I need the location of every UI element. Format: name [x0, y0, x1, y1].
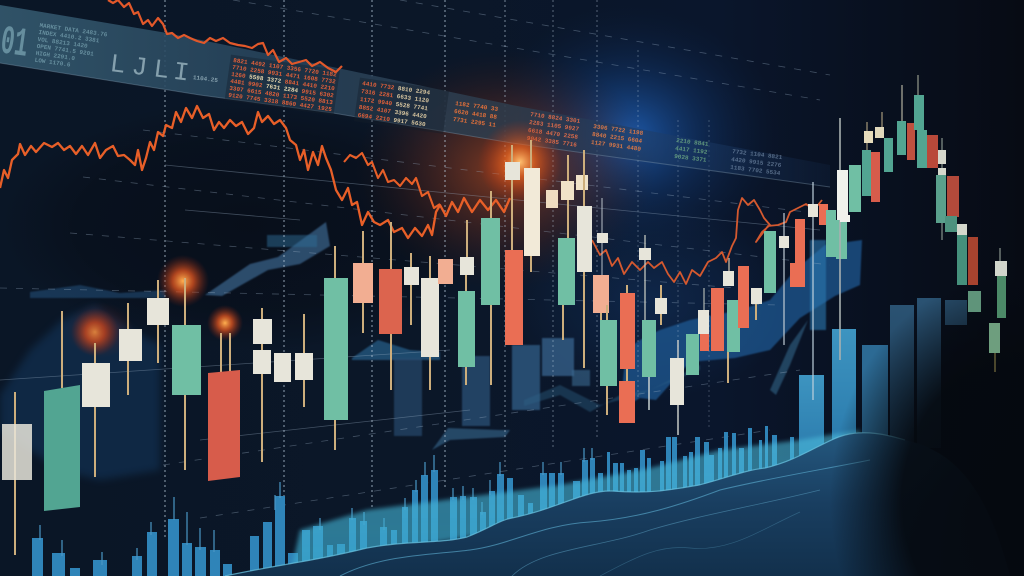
candle: teal	[997, 276, 1006, 318]
ticker text: red data table three: 7731 2295 11	[452, 116, 497, 129]
candle: pale	[460, 220, 474, 275]
candle: teal	[826, 210, 836, 257]
candle: teal	[914, 75, 924, 130]
candlesticks: centre cluster	[481, 140, 762, 435]
ticker text: red data table four: 2283 1105 9927	[529, 119, 580, 133]
background translucent area charts	[0, 222, 862, 480]
orange price line: second strand	[344, 153, 440, 208]
ticker text: red data table two: 7316 2281 6633 1120	[361, 88, 430, 104]
candle: teal	[764, 231, 776, 293]
candle: pale	[837, 118, 850, 360]
ticker text: red data table five: 1127 9931 4480	[590, 139, 642, 153]
candle: teal	[44, 311, 80, 511]
candle: red	[790, 219, 805, 287]
candle: pale	[2, 392, 32, 555]
ticker text: blue data table: 7732 1104 8821	[732, 148, 783, 161]
ticker text: red data table one: 9120 7745 3318 8860 4427 1925	[228, 92, 333, 113]
candle: pale	[524, 140, 540, 272]
ticker text: red data table two	[354, 78, 449, 134]
candle: pale	[561, 155, 574, 238]
candle: pale	[957, 224, 967, 235]
ticker text: left data block: INDEX 4410.2 3381	[38, 29, 100, 44]
candlesticks: right cluster	[764, 75, 1007, 400]
candle: pale	[253, 308, 272, 462]
market data ticker band	[0, 5, 830, 187]
candle: dim teal	[989, 323, 1000, 372]
chart grid lines	[0, 0, 830, 518]
candle: teal	[558, 238, 575, 340]
ticker text: red data table three: 1182 7740 33	[455, 100, 499, 113]
candle: pale	[779, 213, 789, 345]
ticker text: red data table two: 1172 9940 5528 7741	[359, 96, 429, 112]
candle: peach	[593, 275, 609, 340]
ticker text: bracket block: 1104.25	[192, 74, 219, 84]
candle: pale	[751, 288, 762, 320]
candle: red	[927, 135, 938, 168]
candle: red	[379, 222, 402, 390]
orange price line: upper	[108, 0, 342, 72]
orange glows behind wicks	[66, 120, 562, 358]
candle: teal	[324, 246, 348, 450]
candle: pale	[864, 131, 873, 143]
candle: teal	[172, 278, 201, 470]
ticker text: red data table five	[590, 123, 644, 153]
ticker text: red data table four: 7710 8824 3301	[530, 111, 581, 125]
candle: dim teal	[968, 291, 981, 312]
candle: orange	[505, 250, 523, 345]
candle: teal	[897, 85, 906, 155]
candle: teal	[884, 138, 893, 172]
orange price line: lower left	[0, 106, 510, 238]
candle: teal	[686, 334, 699, 375]
candle: pale	[670, 340, 684, 435]
candle: teal	[936, 175, 946, 223]
candle: red	[700, 334, 709, 351]
candle: pale	[576, 175, 588, 190]
data terrain mountain	[225, 433, 1010, 576]
candle: pale	[274, 353, 291, 382]
ticker text: red data table five: 3306 7722 1198	[593, 123, 644, 137]
candle: teal	[600, 305, 617, 415]
ticker text: red data table three	[452, 100, 499, 129]
candle: pale	[82, 343, 110, 477]
volume bars	[32, 426, 794, 576]
ticker text: bracket block: I	[172, 57, 191, 88]
candle: peach	[353, 231, 373, 333]
vertical dotted grid lines	[165, 0, 709, 540]
ticker text: bracket block: L	[152, 54, 171, 86]
candle: teal	[945, 216, 957, 232]
volume bar wicks	[40, 448, 592, 565]
ticker text: left data block: MARKET DATA 2483.76	[39, 22, 108, 39]
candle: red	[619, 369, 635, 423]
ticker text: red data table four: 6618 4470 2258	[527, 127, 579, 141]
candle: teal	[836, 220, 847, 259]
candle: pale	[253, 350, 271, 374]
ticker text: bracket block: J	[130, 52, 149, 83]
ticker text: green data table	[674, 137, 709, 164]
candle: pale	[655, 285, 667, 325]
ticker text: red data table one	[225, 55, 340, 116]
large background bars	[799, 298, 967, 460]
cyan glow band above terrain	[290, 430, 860, 576]
ticker text: red data table three: 6620 4418 88	[454, 108, 498, 121]
candle: red	[947, 176, 959, 217]
candle: red	[208, 333, 240, 481]
ticker text: left data block: VOL 88213 1420	[37, 36, 88, 50]
candle: teal	[642, 320, 656, 410]
candlesticks: left cluster	[2, 220, 475, 555]
candle: peach	[438, 259, 453, 284]
ticker text: blue data table: 1183 7702 5534	[730, 164, 781, 177]
candle: pale	[938, 138, 946, 240]
candle: red	[620, 285, 635, 369]
ticker text: red data table four: 9042 3385 7716	[526, 135, 578, 149]
ticker text: red data table two: 4410 7732 8810 2294	[362, 80, 431, 97]
candle: teal	[481, 191, 500, 385]
candle: pale	[421, 256, 439, 390]
candle: red	[711, 288, 724, 351]
ticker text: red data table two: 8852 4107 3396 4420	[358, 104, 428, 120]
candle: red	[871, 152, 880, 202]
candle: pale	[577, 150, 592, 368]
ticker text: red data table five: 8840 2215 6604	[592, 131, 643, 145]
ticker text: green data table: 2210 8841	[676, 137, 709, 148]
candle: red	[968, 237, 978, 285]
candle: pale	[147, 280, 169, 363]
ticker text: red data table one: 7710 2258 9931 4471 1608 7732	[232, 64, 337, 86]
candle: pale	[723, 258, 734, 286]
candle: pale	[295, 314, 313, 407]
ticker text: red data table one: 8821 4492 1107 3356 7720 1182	[233, 57, 337, 79]
ticker text: bracket block: L	[108, 49, 127, 81]
candle: pale	[404, 253, 419, 325]
ticker text: left data block	[0, 17, 108, 79]
candle: teal	[458, 275, 475, 385]
ticker text: left data block: HIGH 2291.0	[35, 50, 76, 62]
candle: teal	[727, 300, 740, 383]
candle: teal	[862, 122, 871, 196]
candle: pale	[546, 190, 558, 208]
ticker text: red data table one: 1260 5598 3372 8841 4410 2210	[231, 71, 336, 92]
candle: pale	[808, 182, 818, 400]
candle: pale	[505, 145, 520, 250]
ticker text: red data table two: 6694 2210 9917 5630	[357, 112, 426, 128]
candle: pale	[995, 248, 1007, 276]
ticker text: green data table: 4417 1192	[675, 145, 708, 156]
ticker text: blue data table	[730, 148, 783, 177]
ticker text: green data table: 9028 3371	[674, 153, 707, 164]
candle: pale	[698, 288, 709, 334]
candle: teal	[957, 235, 967, 285]
ticker text: red data table one: 3307 6615 4820 1173 5520 8813	[229, 85, 334, 106]
candle: pale	[639, 235, 651, 320]
ticker text: red data table one: 4481 9902 7631 2284 9915 6302	[230, 78, 335, 99]
orange price line: right segment	[592, 198, 822, 284]
ticker text: bracket block	[108, 49, 221, 92]
dark fade on right side	[820, 275, 1024, 576]
candle: pale	[597, 198, 608, 275]
ticker text: left data block: OPEN 7741.5 9201	[36, 43, 95, 58]
ticker text: red data table four	[526, 111, 581, 149]
ticker text: left data block: LOW 1170.6	[34, 57, 71, 69]
ticker text: blue data table: 4420 9915 2276	[731, 156, 782, 169]
candle: red	[907, 123, 915, 160]
candle: pale	[875, 112, 884, 138]
candle: teal	[917, 130, 927, 168]
candle: pale	[119, 303, 142, 395]
candle: red	[738, 266, 749, 328]
candle: red	[819, 204, 828, 225]
candle: teal	[849, 165, 861, 212]
